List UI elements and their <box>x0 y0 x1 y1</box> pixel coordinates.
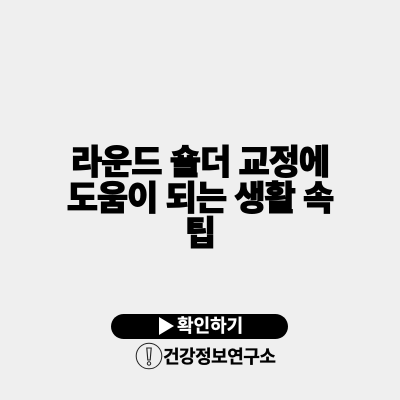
button label: 확인하기 <box>177 316 243 336</box>
button: confirm <box>111 314 288 339</box>
title <box>67 144 334 253</box>
title: 도움이 되는 생활 속 <box>67 180 333 218</box>
title: 라운드 숄더 교정에 <box>71 144 329 182</box>
brand row <box>136 342 276 370</box>
icon: exclamation circle <box>136 342 162 370</box>
title: 팁 <box>185 215 215 253</box>
brand name: 건강정보연구소 <box>163 347 275 367</box>
icon: play triangle <box>159 317 174 335</box>
